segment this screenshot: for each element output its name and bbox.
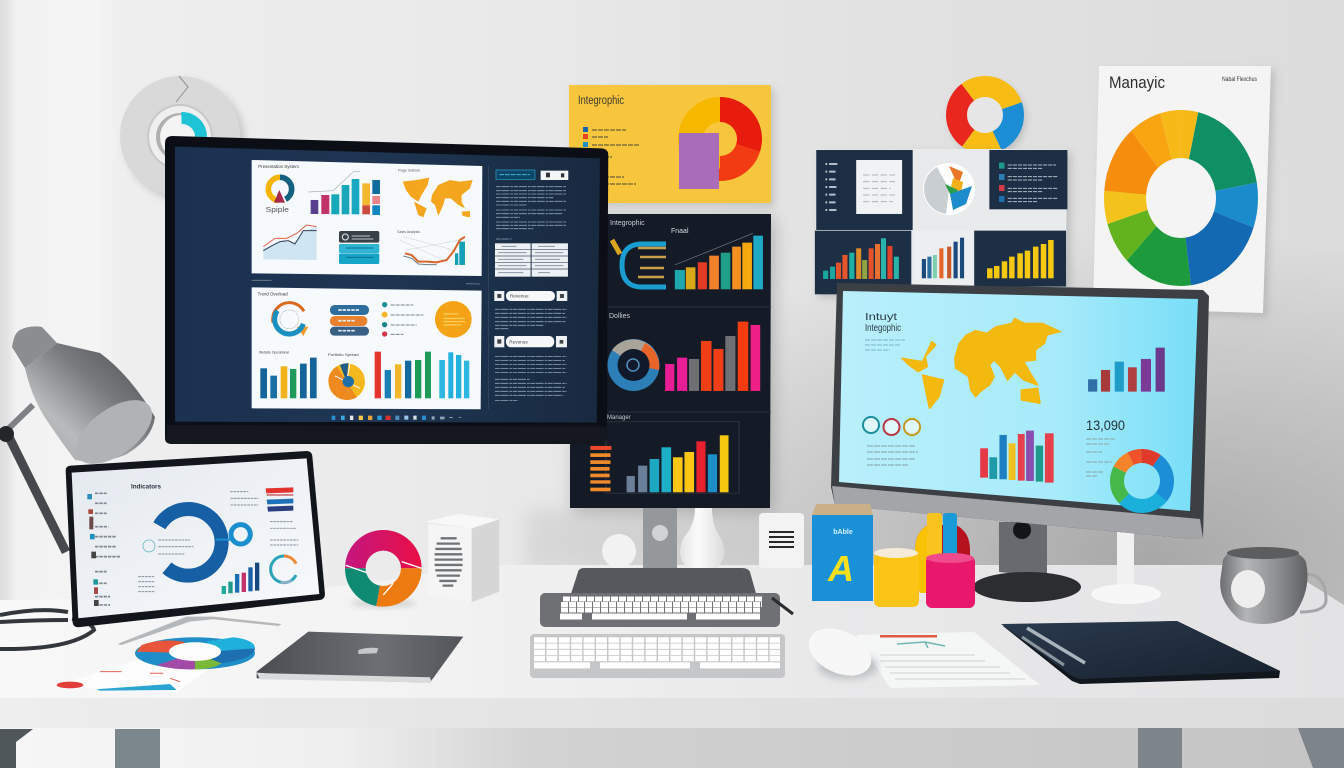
- bar chart left: Website Operational: [259, 350, 289, 354]
- legend list: [382, 302, 423, 337]
- pink cup: [926, 553, 975, 608]
- trend chart: Sales Analysis: [397, 230, 420, 234]
- dark dashboard column: [570, 214, 775, 512]
- sidebar row one: [494, 291, 567, 301]
- bar chart right: [375, 352, 469, 398]
- steel mug: [1220, 547, 1326, 624]
- wall disc: grey rings: [120, 76, 245, 201]
- paper marks: [57, 672, 180, 691]
- box label: bAble: [833, 529, 853, 536]
- bar chart: panel two: [665, 322, 760, 391]
- silver chin: [832, 486, 1203, 539]
- pie chart: [328, 353, 365, 400]
- world map: [398, 169, 473, 217]
- stacked orange list: [590, 446, 611, 491]
- monitor donut: [1117, 456, 1167, 506]
- poster donut: [690, 110, 750, 168]
- sidebar buttons: [496, 170, 568, 180]
- box letter: A: [827, 548, 854, 589]
- taskbar icons: [332, 416, 461, 420]
- bar chart: [308, 172, 380, 215]
- pie chart: Portfolio Spread: [328, 353, 359, 357]
- speaker box: [759, 513, 804, 568]
- monitor subheading: Integophic: [865, 322, 901, 334]
- stat cards: [339, 231, 379, 264]
- under-desk wall: [0, 728, 1344, 768]
- sidebar text block: [495, 357, 567, 401]
- collage chart: yellow bars: [974, 231, 1066, 287]
- yellow cup: [874, 548, 919, 607]
- lamp opening: [65, 388, 163, 476]
- tablet text lines: [138, 492, 298, 592]
- poster note: Nabal Flexchus: [1222, 77, 1257, 83]
- desk: [0, 565, 1344, 768]
- right monitor with world map: [831, 283, 1209, 539]
- lamp shade: [25, 343, 155, 462]
- pens: [1027, 628, 1085, 663]
- monitor heading: Intuyt: [865, 312, 897, 323]
- lower bar chart: [980, 431, 1054, 483]
- heading: panel one: Integrophic: [610, 220, 645, 227]
- poster title: Manayic: [1109, 73, 1165, 92]
- white mouse: [801, 619, 879, 685]
- legend lines: [1086, 439, 1116, 476]
- bar chart: panel three: [606, 422, 739, 493]
- base: [973, 572, 1081, 602]
- poster: Manayic donut: [1093, 66, 1275, 317]
- laptop: [257, 632, 463, 683]
- panel caption: Trend Overload: [258, 292, 288, 297]
- second monitor stand: [973, 521, 1161, 604]
- big blue ring: [155, 509, 222, 576]
- collage pie: [923, 163, 975, 215]
- desk legs: [0, 728, 1344, 768]
- ring diagram: [273, 303, 308, 336]
- lamp cable: [0, 610, 94, 649]
- collage chart: dark multicolour bars: [815, 231, 911, 294]
- rear keyboard: [540, 568, 793, 627]
- dark donut chart: [608, 339, 660, 391]
- lamp arm: [0, 405, 66, 552]
- paper document: [856, 632, 1040, 688]
- yellow world map: [902, 318, 1061, 408]
- tablet title: Indicators: [131, 484, 161, 491]
- heading: panel three: Manager: [607, 415, 631, 421]
- keys: [560, 599, 762, 616]
- bezel: [165, 136, 608, 444]
- tablet bars: [222, 563, 259, 594]
- orange callout circle: [435, 301, 472, 338]
- sidebar row two: [494, 336, 567, 347]
- sidebar table: [495, 243, 568, 277]
- collage panel: text list: [989, 150, 1067, 209]
- blue marker: [943, 513, 957, 558]
- yellow and red vase: [915, 525, 970, 593]
- collage chart: light bars: [913, 231, 973, 284]
- panel dividers: [252, 280, 480, 284]
- area line chart: [263, 225, 317, 260]
- desk lamp: [0, 326, 163, 649]
- screen: [175, 147, 600, 423]
- tablet stacked bars: [266, 487, 293, 512]
- poster donut chart: [1125, 134, 1237, 262]
- monitor frame: [831, 283, 1209, 539]
- tablet frame: [66, 451, 325, 627]
- sidebar text block: [496, 187, 567, 239]
- blue letter box: [812, 504, 873, 601]
- wall donut: [950, 81, 1026, 157]
- speaker grill: [435, 538, 463, 586]
- donut chart: [268, 177, 292, 201]
- screen: [839, 291, 1198, 511]
- world map: Page Outlook: [398, 169, 420, 173]
- monitor intro text: [865, 340, 905, 350]
- heading: panel two: Dollies: [609, 313, 631, 320]
- tablet list: [87, 493, 120, 606]
- speaker cube: [425, 514, 499, 602]
- trend chart: [397, 230, 465, 265]
- upper bar chart: [1088, 348, 1165, 392]
- lamp cap: [12, 326, 57, 368]
- colourful desk ring: [345, 530, 422, 608]
- collage panel: checklist: [816, 150, 913, 230]
- mug clock face: [1231, 570, 1265, 608]
- bar chart: panel one: [675, 233, 763, 289]
- white pole: [1117, 530, 1134, 590]
- paper with flat donut: [57, 637, 255, 693]
- tablet small icon: [143, 540, 155, 552]
- tablet screen: [72, 458, 319, 618]
- pill buttons: [330, 305, 369, 336]
- dark slate tablet with pens: [1001, 621, 1280, 684]
- monitor stand: [643, 508, 677, 568]
- tablet stand: [117, 617, 282, 645]
- stat label: Spiple: [266, 205, 289, 214]
- poster purple card: [679, 133, 719, 189]
- pen cup group: [874, 513, 975, 608]
- bar chart left: [259, 350, 317, 398]
- dashboard panel bottom: [252, 287, 482, 409]
- white egg: [602, 534, 636, 568]
- poster: yellow infographic: [569, 85, 775, 207]
- sidebar text block: [495, 309, 567, 329]
- yellow marker: [927, 513, 942, 558]
- tablet small donut: [271, 556, 297, 583]
- big number: 13,090: [1086, 418, 1125, 433]
- keys: [534, 640, 780, 665]
- flat donut: [135, 637, 255, 669]
- pen: [772, 598, 793, 614]
- front keyboard: [530, 634, 785, 678]
- neck: [999, 522, 1047, 577]
- desk surface: [0, 565, 1344, 698]
- funnel diagram: [612, 240, 666, 287]
- poster legend: [583, 127, 640, 184]
- desk front edge: [0, 698, 1344, 728]
- white vase: [680, 508, 724, 568]
- sidebar row two: Revenue: [509, 340, 528, 345]
- poster: dashboard collage: [815, 149, 1071, 298]
- connector ring: [216, 525, 250, 544]
- panel caption: Presentation System: [258, 164, 299, 169]
- dashboard panel top: [252, 160, 482, 276]
- monitor stand and vase group: [602, 508, 804, 568]
- tablet on stand: [66, 451, 325, 645]
- document marks: [880, 635, 1025, 679]
- sidebar: [488, 166, 568, 409]
- main dark monitor: [165, 136, 608, 444]
- sidebar row one: Revenue: [510, 294, 529, 299]
- monitor list text: [867, 446, 918, 465]
- heading: panel one chart: Fnaal: [671, 228, 689, 235]
- icon trio: [863, 417, 920, 435]
- donut wedge: [274, 190, 285, 203]
- white base: [1091, 584, 1161, 604]
- poster title: Integrophic: [578, 95, 624, 107]
